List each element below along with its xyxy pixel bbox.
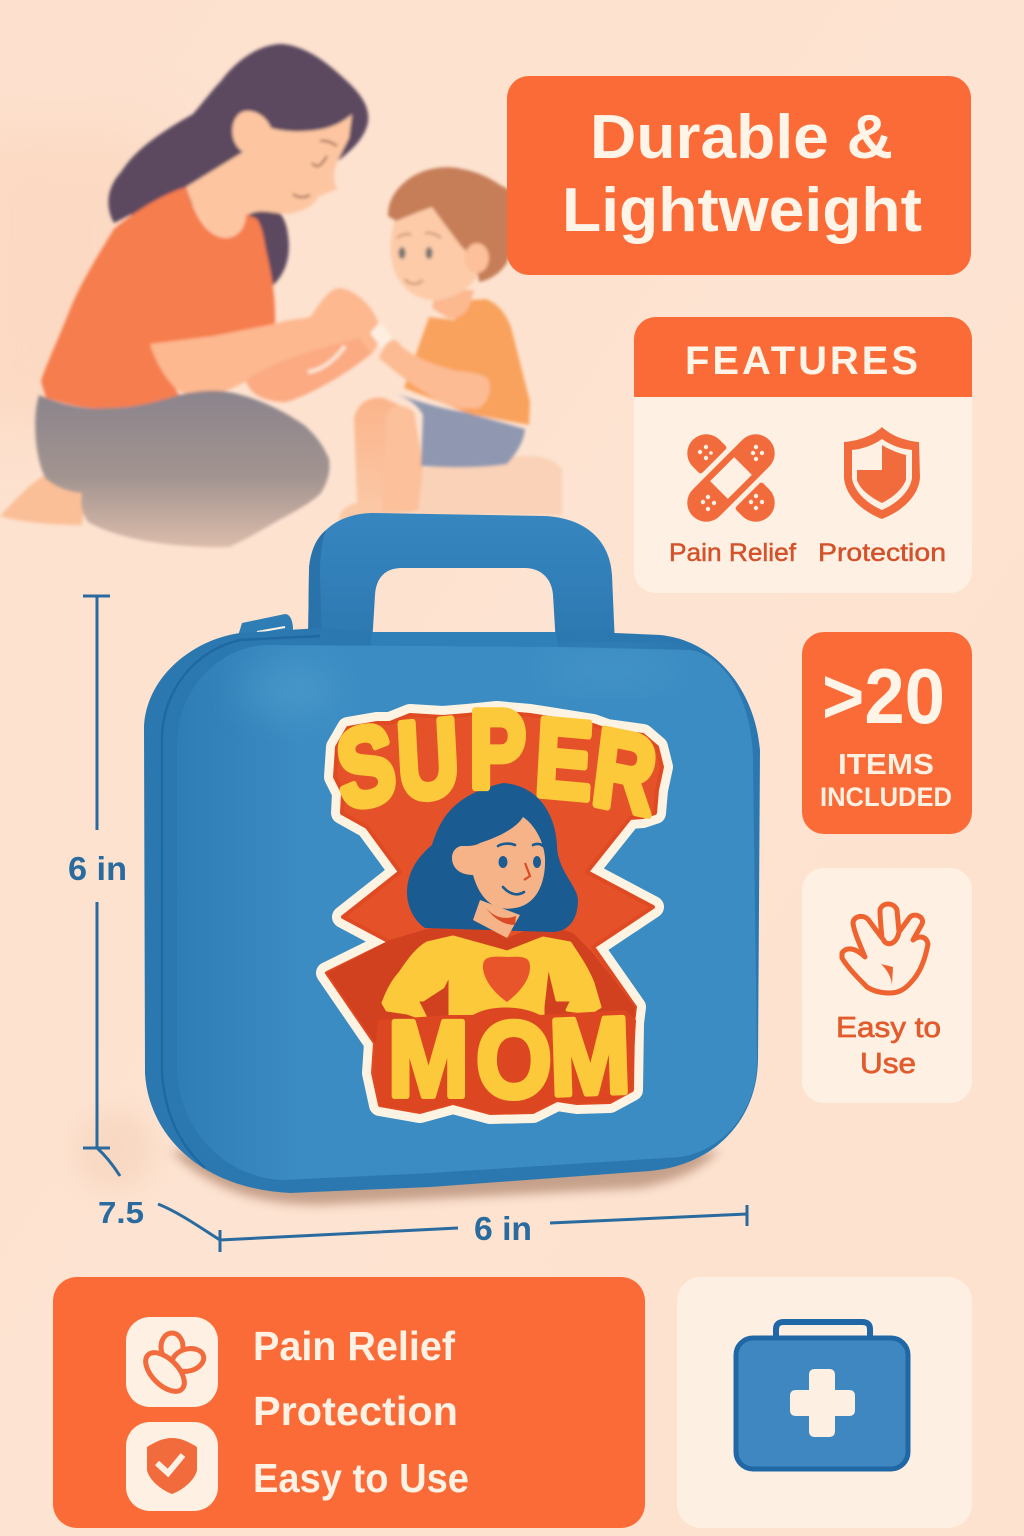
- icon: first aid kit: [736, 1322, 908, 1469]
- easy to use text: Use: [860, 1048, 916, 1080]
- icon: shield check tile: [126, 1422, 218, 1511]
- hero hair: [407, 783, 578, 932]
- mother arms: [150, 288, 379, 402]
- items included text: INCLUDED: [820, 782, 952, 812]
- mother hair back: [230, 196, 289, 295]
- mother neck and face: [186, 111, 352, 238]
- mother hair: [108, 44, 368, 223]
- icon: shield: [844, 427, 920, 519]
- panel: easy to use: [802, 868, 972, 1103]
- hero neck: [473, 900, 520, 938]
- child face: [391, 190, 484, 300]
- word: SUPER: SUPER: [331, 688, 663, 839]
- bandage being applied: [370, 322, 393, 350]
- background soft shading: [0, 130, 720, 1205]
- child shorts: [386, 391, 525, 467]
- case rim between handle legs: [370, 632, 558, 647]
- width label: 6 in: [474, 1210, 532, 1247]
- child shirt: [404, 299, 530, 425]
- dimension: height 6 in: [68, 596, 127, 1176]
- sticker: super mom: [327, 688, 663, 1120]
- benefit: pain relief: Pain Relief: [253, 1323, 455, 1369]
- child seat: [418, 456, 562, 515]
- panel: items count: [802, 632, 972, 834]
- hero yellow suit: [383, 937, 600, 1027]
- label: protection: Protection: [818, 539, 946, 567]
- depth label: 7.5: [98, 1195, 144, 1230]
- title banner: [507, 76, 971, 275]
- cape: [327, 920, 635, 1043]
- icon: crossed bandage: [679, 426, 783, 530]
- child hair: [388, 167, 510, 282]
- benefit: protection: Protection: [253, 1388, 458, 1434]
- items included text: ITEMS: [838, 749, 934, 781]
- word: MOM: MOM: [388, 994, 632, 1120]
- mother shirt: [41, 187, 275, 408]
- hero heart emblem: [483, 957, 530, 1002]
- easy to use text: Easy to: [836, 1012, 941, 1044]
- mother lower arm shading: [246, 338, 371, 402]
- title text: Durable &: [590, 103, 893, 172]
- mother mouth and eye: [293, 141, 337, 197]
- features heading: FEATURES: [685, 339, 918, 383]
- child eyes and smile: [399, 247, 433, 259]
- dimension: width 6 in: [220, 1205, 747, 1252]
- panel: kit icon: [677, 1277, 972, 1528]
- benefit: easy to use: Easy to Use: [253, 1455, 469, 1501]
- case front face: [177, 645, 757, 1180]
- zipper seam: [162, 636, 320, 1168]
- product: blue first aid case: [144, 513, 760, 1193]
- case handle: [308, 513, 615, 645]
- hero face: [452, 817, 545, 909]
- hero eyes, nose and smile: [498, 844, 543, 894]
- icon: hand: [842, 904, 928, 993]
- label: pain relief: Pain Relief: [669, 539, 796, 567]
- sticker outline: [327, 712, 662, 1113]
- zipper pull: [238, 614, 293, 636]
- mother trousers: [35, 391, 329, 547]
- child neck: [432, 290, 474, 318]
- case highlights: [240, 656, 680, 716]
- case body outer: [144, 628, 760, 1193]
- height label: 6 in: [68, 850, 127, 887]
- child ear: [465, 243, 489, 273]
- handle left shade: [308, 530, 326, 645]
- panel: features: [634, 317, 972, 593]
- dimension: depth 7.5: [98, 1195, 220, 1240]
- panel: benefits: [53, 1277, 645, 1528]
- mother foot: [0, 476, 86, 525]
- title text: Lightweight: [562, 176, 922, 245]
- child arm: [379, 340, 490, 408]
- number: more than 20: >20: [822, 652, 945, 740]
- child legs: [339, 398, 423, 522]
- icon: clover tile: [126, 1317, 218, 1407]
- sticker red base: [327, 712, 662, 1113]
- illustration: mother and child applying a bandage: [0, 44, 562, 547]
